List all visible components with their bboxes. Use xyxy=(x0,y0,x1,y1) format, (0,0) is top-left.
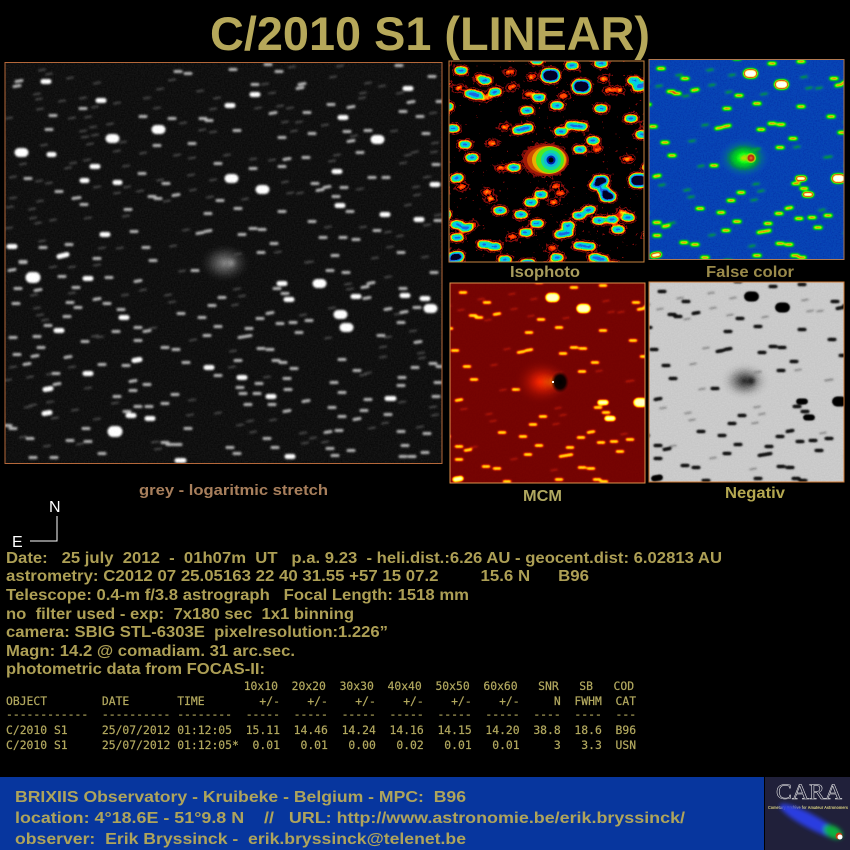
text block: observation details: astrometry: C2012 07 25.05163 22 40 31.55 +57 15 07.2 15.6 N B96 xyxy=(6,568,589,585)
footer bar: observatory details: location: 4°18.6E - 51°9.8 N // URL: http://www.astronomie.be/erik.bryssinck/ xyxy=(15,810,686,827)
text block: observation details: no filter used - exp: 7x180 sec 1x1 binning xyxy=(6,606,354,623)
text block: observation details: Date: 25 july 2012 - 01h07m UT p.a. 9.23 - heli.dist.:6.26 AU - geocent.dist: 6.02813 AU xyxy=(6,550,722,567)
footer bar: observatory details xyxy=(0,777,764,850)
table: FOCAS-II photometric data: ------------ ---------- -------- ----- ----- ----- ----- ----- ----- ---- ---- --- xyxy=(6,707,636,721)
compass: north and east xyxy=(12,499,61,551)
comet nucleus xyxy=(746,153,756,163)
panel: MCM image xyxy=(450,282,646,484)
comet isophote rings xyxy=(523,144,569,176)
compass: north and east: E xyxy=(12,534,23,551)
footer bar: observatory details: observer: Erik Bryssinck - erik.bryssinck@telenet.be xyxy=(15,831,466,848)
table: FOCAS-II photometric data: OBJECT DATE TIME +/- +/- +/- +/- +/- +/- N FWHM CAT xyxy=(6,694,636,708)
table: FOCAS-II photometric data: C/2010 S1 25/07/2012 01:12:05* 0.01 0.01 0.00 0.02 0.01 0.01 3 3.3 USN xyxy=(6,738,636,752)
comet glow and dark residual xyxy=(516,364,568,400)
table: FOCAS-II photometric data: 10x10 20x20 30x30 40x40 50x50 60x60 SNR SB COD xyxy=(4,679,634,693)
caption: MCM: MCM xyxy=(523,488,562,505)
text block: observation details: Telescope: 0.4-m f/3.8 astrograph Focal Length: 1518 mm xyxy=(6,587,469,604)
logo: CARA comet: CARA xyxy=(776,779,842,804)
title: C/2010 S1 (LINEAR) xyxy=(210,7,650,60)
caption: false color: False color xyxy=(706,264,794,281)
panel: main grey logarithmic stretch image xyxy=(0,50,450,475)
panel: isophoto image xyxy=(448,60,644,262)
logo: CARA comet xyxy=(765,777,850,850)
text block: observation details: camera: SBIG STL-6303E pixelresolution:1.226” xyxy=(6,624,388,641)
table: FOCAS-II photometric data: C/2010 S1 25/07/2012 01:12:05 15.11 14.46 14.24 14.16 14.15 14.20 38.8 18.6 B96 xyxy=(6,723,636,737)
caption: negativ: Negativ xyxy=(725,485,785,502)
caption: isophoto: Isophoto xyxy=(510,264,580,281)
footer bar: observatory details: BRIXIIS Observatory - Kruibeke - Belgium - MPC: B96 xyxy=(15,789,466,806)
caption: grey logarithmic stretch: grey - logaritmic stretch xyxy=(139,482,328,499)
panel: negative image xyxy=(648,282,844,482)
table: FOCAS-II photometric data xyxy=(4,679,636,752)
text block: observation details xyxy=(6,550,722,678)
text block: observation details: photometric data from FOCAS-II: xyxy=(6,661,265,678)
text block: observation details: Magn: 14.2 @ comadiam. 31 arc.sec. xyxy=(6,643,295,660)
panel: false color image xyxy=(648,59,844,260)
compass: north and east: N xyxy=(49,499,61,516)
